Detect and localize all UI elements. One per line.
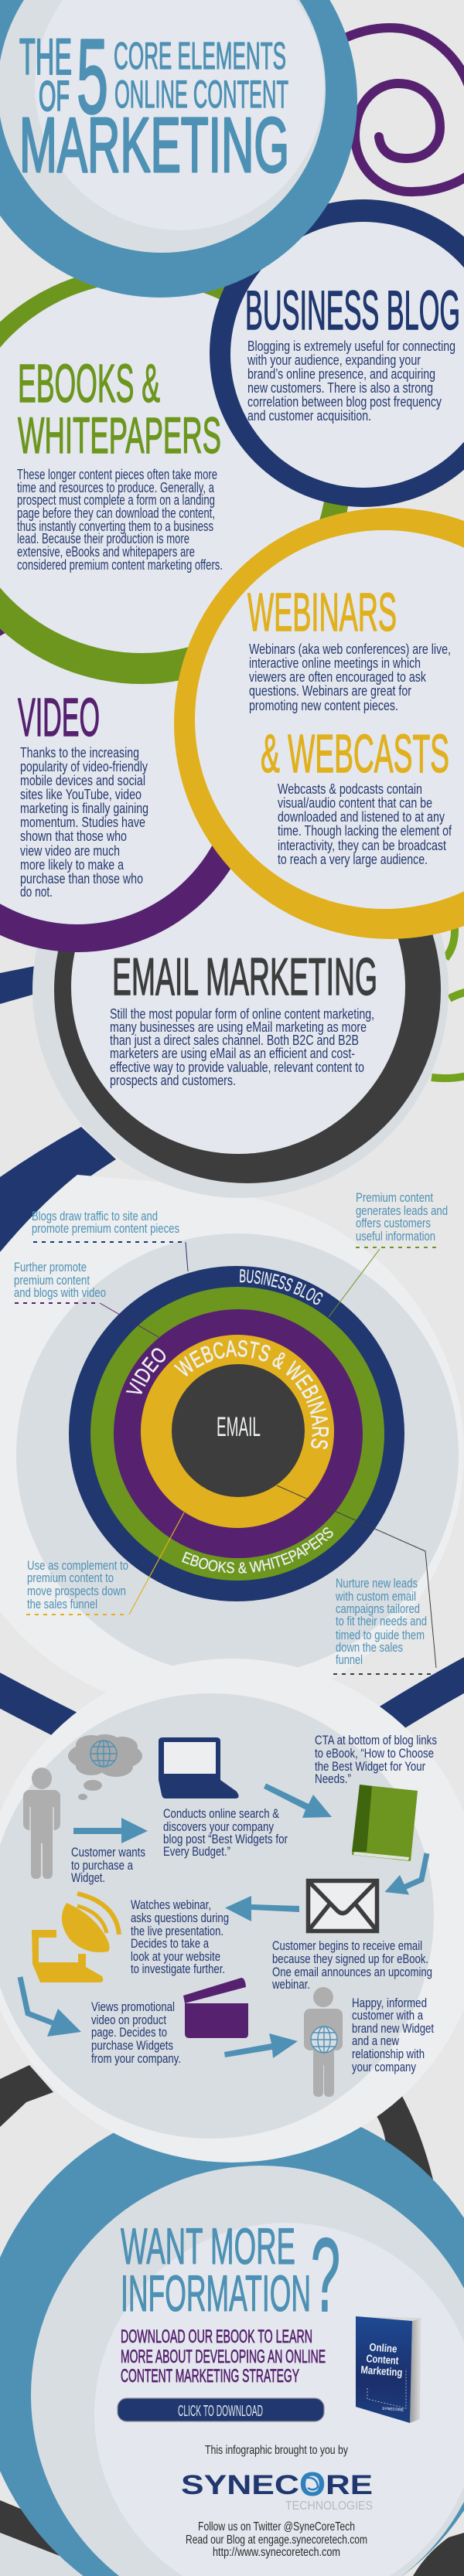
callout: webinars: premium content to <box>27 1570 114 1585</box>
heading: want more information: ? <box>311 2217 340 2333</box>
journey text: views video: from your company. <box>91 2051 181 2066</box>
video ring <box>0 587 260 952</box>
callout: webinars: move prospects down <box>27 1584 126 1598</box>
callout: email with leader: Nurture new leads <box>336 1576 418 1591</box>
journey text: online search: discovers your company <box>163 1819 274 1834</box>
callout: video: and blogs with video <box>14 1285 106 1300</box>
panel: funnel diagram <box>14 1190 448 1615</box>
journey text: call to action: to eBook, “How to Choose <box>315 1746 434 1761</box>
email body text: marketers are using eMail as an efficient and cost- <box>110 1046 355 1061</box>
video body text: purchase than those who <box>20 871 143 886</box>
video body text <box>20 745 148 900</box>
ebooks body text: lead. Because their production is more <box>17 531 189 546</box>
green spiral fragments at right edge <box>432 927 464 1078</box>
purple spiral decoration <box>340 28 464 192</box>
concentric rings <box>69 1266 404 1601</box>
email body text: effective way to provide valuable, relevant content to <box>110 1060 364 1075</box>
journey text: views video: page. Decides to <box>91 2025 167 2040</box>
email body text <box>110 1006 374 1088</box>
panel: email marketing <box>32 782 449 1198</box>
callout: email with leader: to fit their needs and <box>336 1614 427 1628</box>
ebooks body text: page before they can download the content, <box>17 505 215 521</box>
journey text: online search <box>163 1806 288 1859</box>
journey text: receive email: Customer begins to receive email <box>272 1938 422 1953</box>
journey text: happy customer: your company <box>352 2060 416 2074</box>
video body text: sites like YouTube, video <box>20 787 142 802</box>
journey text: watches webinar: the live presentation. <box>131 1924 223 1938</box>
journey text: customer wants: Widget. <box>71 1870 105 1885</box>
callout: video: Further promote <box>14 1260 87 1274</box>
email body text: than just a direct sales channel. Both B2C and B2B <box>110 1033 359 1048</box>
arrow: laptop to ebook <box>264 1784 332 1818</box>
button: click to download <box>118 2398 324 2421</box>
panel: webinars and webcasts <box>174 508 464 939</box>
logo: synecore technologies: O <box>299 2465 326 2503</box>
follow links <box>186 2520 367 2559</box>
callout: webinars: the sales funnel <box>27 1597 97 1611</box>
email ring <box>32 782 449 1198</box>
ebooks body text: thus instantly converting them to a business <box>17 519 213 534</box>
business blog body text: with your audience, expanding your <box>247 352 421 368</box>
logo: synecore technologies <box>181 2465 373 2513</box>
icon: thought cloud with globe <box>68 1734 142 1800</box>
panel: ebooks and whitepapers <box>0 267 350 684</box>
journey text: watches webinar: to investigate further. <box>131 1962 225 1976</box>
journey text: call to action <box>315 1733 437 1786</box>
arrow: ebook to email <box>385 1853 427 1895</box>
journey text: watches webinar: Decides to take a <box>131 1936 209 1951</box>
navy ring fragments <box>0 966 116 1252</box>
journey text: happy customer: brand new Widget <box>352 2021 434 2036</box>
ebooks body text: prospect must complete a form on a landing <box>17 492 215 508</box>
callout: blogs <box>32 1209 188 1271</box>
subheading: download our ebook: MORE ABOUT DEVELOPING AN ONLINE <box>121 2346 326 2367</box>
journey text: views video <box>91 1999 181 2066</box>
icon: happy customer with globe <box>304 1987 343 2097</box>
video body text: more likely to make a <box>20 857 125 873</box>
video body text: do not. <box>20 884 53 900</box>
heading: ebooks and whitepapers <box>18 353 221 464</box>
ebook cover: Content <box>366 2352 399 2367</box>
journey text: online search: blog post “Best Widgets for <box>163 1832 288 1846</box>
journey text: happy customer: relationship with <box>352 2047 425 2061</box>
email body text: many businesses are using eMail marketing as more <box>110 1019 367 1035</box>
title text: CORE ELEMENTS <box>114 36 286 77</box>
heading: want more information: INFORMATION <box>121 2265 311 2322</box>
callout: email with leader: campaigns tailored <box>336 1601 420 1616</box>
journey text: receive email: webinar. <box>271 1977 310 1992</box>
ebooks body text: extensive, eBooks and whitepapers are <box>17 544 195 560</box>
video body text: shown that those who <box>20 829 127 844</box>
title text: ONLINE CONTENT <box>114 73 288 116</box>
icon: satellite dish on laptop <box>32 1894 119 1982</box>
heading: ebooks and whitepapers: WHITEPAPERS <box>18 407 221 464</box>
panel: business blog <box>210 199 464 507</box>
journey text: views video: purchase Widgets <box>91 2038 173 2053</box>
callout: blogs: promote premium content pieces <box>32 1221 179 1236</box>
logo: synecore technologies: TECHNOLOGIES <box>285 2499 373 2513</box>
callout: video: premium content <box>14 1273 90 1288</box>
icon: envelope <box>308 1880 377 1931</box>
panel: call to action <box>0 2099 464 2576</box>
journey text: watches webinar: asks questions during <box>131 1911 229 1925</box>
title text: 5 <box>77 18 108 136</box>
icon: customer person <box>23 1768 60 1879</box>
journey text: customer wants: to purchase a <box>71 1858 133 1873</box>
icon: navy laptop <box>159 1737 239 1798</box>
ring labels: EMAIL <box>217 1412 261 1442</box>
arrow: person to laptop <box>73 1818 148 1843</box>
ring labels: EBOOKS & WHITEPAPERS <box>182 1527 333 1574</box>
journey text: customer wants <box>71 1845 145 1885</box>
webinars body text: interactive online meetings in which <box>249 655 421 671</box>
callout: email with leader: timed to guide them <box>336 1628 425 1642</box>
callout: video <box>14 1260 159 1337</box>
panel: title <box>0 0 357 298</box>
arrow: email to webinar <box>225 1896 299 1921</box>
subheading: download our ebook: DOWNLOAD OUR EBOOK TO LEARN <box>121 2326 312 2347</box>
panel: customer journey <box>0 1659 464 2163</box>
journey text: online search: Every Budget.” <box>163 1844 230 1859</box>
business blog ring <box>210 199 464 507</box>
grey wedge lower left <box>0 2533 85 2576</box>
video body text: popularity of video-friendly <box>20 759 148 774</box>
follow links: Follow us on Twitter @SyneCoreTech <box>198 2520 355 2533</box>
journey text: watches webinar: Watches webinar, <box>131 1897 211 1912</box>
webcasts body text: to reach a very large audience. <box>278 852 428 867</box>
logo: synecore technologies: SYNEC <box>181 2470 299 2500</box>
callout: webinars: Use as complement to <box>27 1558 128 1573</box>
panel: video <box>0 587 260 952</box>
follow links: Read our Blog at engage.synecoretech.com <box>186 2533 367 2547</box>
subheading: download our ebook <box>121 2326 326 2387</box>
ebooks body text: These longer content pieces often take more <box>17 467 217 482</box>
callout: webinars <box>26 1513 184 1615</box>
ring labels: BUSINESS BLOG <box>240 1269 323 1305</box>
ebook cover <box>356 2316 421 2423</box>
callout: premium content: Premium content <box>356 1190 433 1205</box>
title text <box>19 18 289 189</box>
journey text: online search: Conducts online search & <box>163 1806 280 1821</box>
callout: premium content <box>329 1190 448 1317</box>
video body text: momentum. Studies have <box>20 815 145 830</box>
title text: OF <box>39 72 70 120</box>
video body text: marketing is finally gaining <box>20 801 148 816</box>
brought to you by: This infographic brought to you by <box>205 2444 348 2457</box>
arrow: webinar to video <box>20 1977 81 2037</box>
callout: premium content: useful information <box>356 1229 435 1244</box>
call to action rings <box>0 2099 464 2576</box>
subheading: download our ebook: CONTENT MARKETING STRATEGY <box>121 2366 299 2387</box>
video body text: mobile devices and social <box>20 773 145 788</box>
journey text: watches webinar: look at your website <box>131 1949 220 1964</box>
journey text: customer wants: Customer wants <box>71 1845 145 1860</box>
email body text: Still the most popular form of online content marketing, <box>110 1006 374 1022</box>
webinars ring <box>174 508 464 939</box>
ebooks body text: time and resources to produce. Generally, a <box>17 480 215 495</box>
heading: ebooks and whitepapers: EBOOKS & <box>18 353 160 413</box>
journey text: views video: video on product <box>91 2013 166 2027</box>
ebooks body text: considered premium content marketing offers. <box>17 557 223 573</box>
callout: email with leader: funnel <box>336 1652 363 1667</box>
video body text: Thanks to the increasing <box>20 745 139 761</box>
journey text: receive email <box>271 1938 432 1992</box>
heading: want more information: WANT MORE <box>121 2217 295 2275</box>
journey text: call to action: Needs.” <box>315 1771 351 1786</box>
business blog body text: and customer acquisition. <box>247 408 371 424</box>
journey text: happy customer: customer with a <box>352 2008 423 2023</box>
logo: synecore technologies: RE <box>326 2470 373 2500</box>
panel: video: VIDEO <box>18 687 100 747</box>
light backdrop behind funnel diagram <box>0 1175 464 1712</box>
dark ring fragments <box>0 2065 464 2576</box>
follow links: http://www.synecoretech.com <box>213 2546 340 2559</box>
callout: email with leader <box>277 1485 436 1674</box>
heading: want more information <box>121 2217 340 2333</box>
ring labels <box>125 1269 333 1574</box>
webinars body text <box>249 641 451 713</box>
arrow: video to happy customer <box>224 2033 298 2058</box>
ebooks body text <box>17 467 223 573</box>
webcasts body text: Webcasts & podcasts contain <box>278 781 422 797</box>
journey text: watches webinar <box>131 1897 229 1976</box>
ebooks ring <box>0 267 350 684</box>
ebook cover: Marketing <box>360 2363 403 2378</box>
ring labels: VIDEO <box>125 1348 165 1394</box>
webinars body text: promoting new content pieces. <box>249 698 398 713</box>
journey text: happy customer: and a new <box>352 2033 400 2048</box>
navy ring fragments lower <box>0 1671 464 1745</box>
webcasts body text <box>278 781 452 867</box>
ebook cover: Online <box>369 2340 397 2355</box>
callout: blogs: Blogs draw traffic to site and <box>32 1209 158 1223</box>
callout: email with leader: down the sales <box>336 1640 403 1655</box>
journey text: call to action: the Best Widget for Your <box>315 1759 425 1774</box>
ebook cover: SYNECORE <box>382 2407 404 2413</box>
journey discs <box>0 1659 464 2163</box>
title text: THE <box>19 28 72 85</box>
callout: premium content: offers customers <box>356 1216 431 1230</box>
journey text: happy customer <box>352 1996 434 2074</box>
email body text: prospects and customers. <box>110 1073 236 1088</box>
journey text: happy customer: Happy, informed <box>352 1996 427 2010</box>
video body text: view video are much <box>20 843 120 859</box>
callout: email with leader: with custom email <box>335 1589 416 1604</box>
business blog body text <box>247 339 455 424</box>
button: click to download: CLICK TO DOWNLOAD <box>178 2403 263 2420</box>
ring labels: WEBCASTS & WEBINARS <box>173 1340 329 1449</box>
icon: green book <box>352 1785 418 1861</box>
webinars body text: questions. Webinars are great for <box>249 683 411 699</box>
journey text: views video: Views promotional <box>91 1999 175 2014</box>
title ring <box>0 0 357 298</box>
icon: purple clapperboard <box>183 1978 248 2038</box>
